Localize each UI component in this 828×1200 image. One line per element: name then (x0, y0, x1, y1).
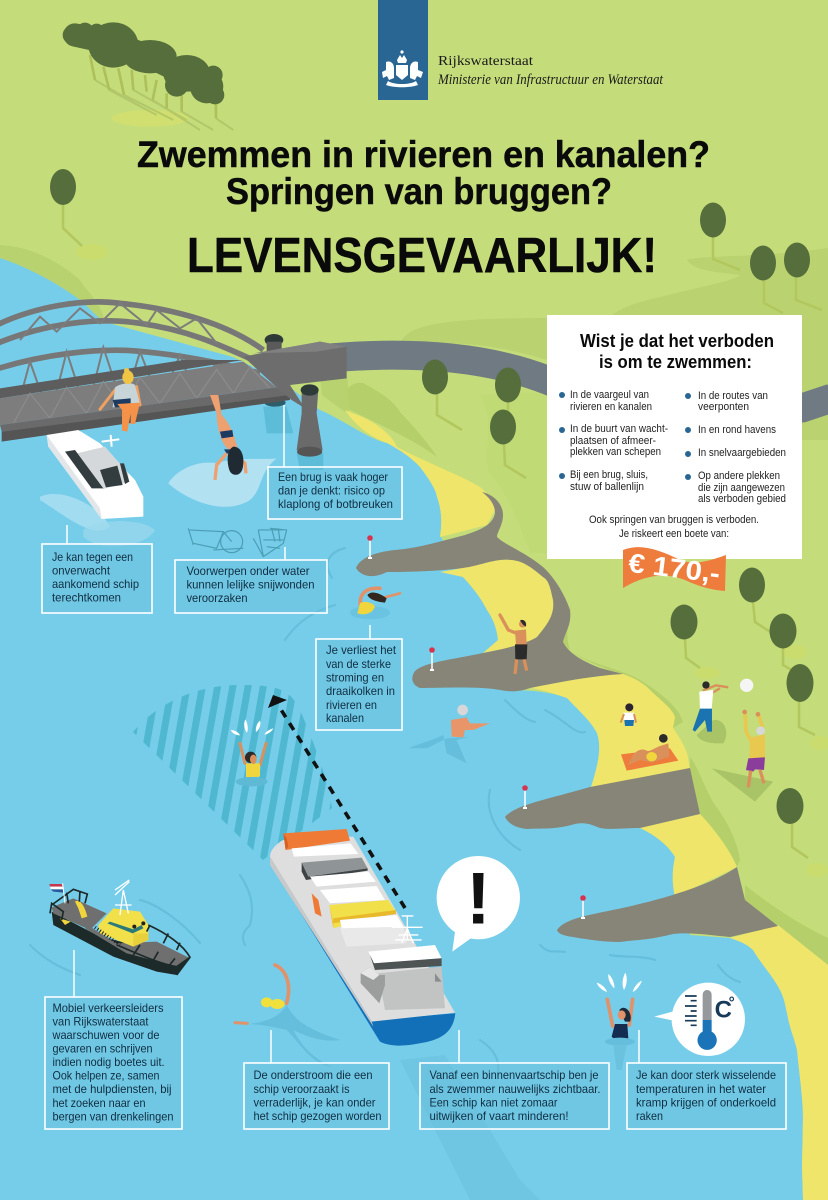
tree cluster top left (63, 22, 233, 130)
callout: currents: draaikolken in (326, 684, 395, 698)
callout: temperature: Je kan door sterk wisselende (636, 1068, 776, 1082)
title: LEVENSGEVAARLIJK! (187, 229, 657, 283)
river water (0, 258, 803, 1200)
callout: traffic controllers: gevaren en schrijven (52, 1042, 152, 1056)
callout: objects under water (175, 547, 327, 613)
logo Rijksoverheid: Ministerie van Infrastructuur en Waterstaat (437, 72, 664, 88)
callout: barely visible: Een schip kan niet zomaar (430, 1096, 558, 1110)
logo text: Rijkswaterstaat (438, 54, 533, 69)
callout: currents: van de sterke (326, 657, 391, 671)
callout: barely visible: uitwijken of vaart minderen! (430, 1109, 568, 1123)
callout: currents: Je verliest het (326, 643, 397, 657)
panel: forbidden places: In en rond havens (698, 424, 776, 436)
panel: forbidden places: Wist je dat het verboden (580, 330, 774, 351)
callout: barely visible (420, 1030, 609, 1129)
panel: forbidden places: Je riskeert een boete van: (619, 528, 729, 540)
callout: traffic controllers: Mobiel verkeersleiders (52, 1001, 164, 1015)
front pillar (297, 390, 323, 450)
panel: forbidden places: stuw of ballenlijn (570, 481, 644, 493)
logo Rijksoverheid (378, 0, 664, 100)
callout: undertow: De onderstroom die een (254, 1068, 372, 1082)
callout: hit by ship: Je kan tegen een (52, 550, 133, 564)
distressed swimmer in dead angle (231, 719, 273, 786)
callout: traffic controllers: met de hulpdiensten, bij (52, 1082, 172, 1096)
panel: forbidden places: plekken van schepen (570, 446, 661, 458)
callout: undertow: verraderlijk, je kan onder (254, 1096, 376, 1110)
title: Zwemmen in rivieren en kanalen? (137, 134, 710, 175)
container ship (270, 829, 455, 1046)
panel: forbidden places: In de vaargeul van (570, 389, 649, 401)
callout: temperature (627, 1030, 786, 1129)
panel: forbidden places (547, 315, 802, 559)
thermometer bubble: ° (729, 994, 735, 1011)
panel: forbidden places: die zijn aangewezen (698, 482, 785, 494)
mast (392, 916, 423, 943)
callout: currents: stroming en (326, 670, 384, 684)
groynes (356, 492, 778, 942)
back pillar (265, 334, 283, 346)
bridge (0, 302, 347, 470)
panel: forbidden places: Bij een brug, sluis, (570, 469, 648, 481)
callout: temperature: temperaturen in het water (636, 1082, 766, 1096)
callout: objects under water: kunnen lelijke snijwonden (186, 578, 314, 592)
callout: bridge height: Een brug is vaak hoger (278, 470, 388, 484)
callout: hit by ship: terechtkomen (52, 590, 121, 604)
speech bubble warning (437, 856, 520, 952)
callout: objects under water: veroorzaken (186, 591, 248, 605)
underwater bike and shopping cart (188, 528, 287, 557)
land shading (0, 245, 828, 965)
callout: undertow: schip veroorzaakt is (254, 1082, 350, 1096)
woman waving in water (597, 973, 642, 1070)
trees (50, 22, 828, 877)
callout: traffic controllers: van Rijkswaterstaat (52, 1014, 149, 1028)
callout: traffic controllers (45, 950, 182, 1129)
callout: traffic controllers: bergen van drenkelingen (52, 1109, 174, 1123)
callout: barely visible: Vanaf een binnenvaartschip ben je (430, 1068, 599, 1082)
old man swimming (408, 705, 490, 763)
shadow of ship in water (400, 1055, 540, 1200)
girl diving from bridge (168, 395, 277, 507)
panel: forbidden places: rivieren en kanalen (570, 401, 652, 413)
callout: hit by ship: aankomend schip (52, 577, 139, 591)
panel: forbidden places: In de buurt van wacht- (570, 423, 668, 435)
panel: forbidden places: Op andere plekken (698, 470, 780, 482)
callout: currents: kanalen (326, 711, 364, 725)
flag markers (367, 535, 586, 918)
east road (330, 355, 828, 414)
panel: forbidden places: plaatsen of afmeer- (570, 435, 656, 447)
callout: currents (316, 625, 402, 730)
hatched area: dead angle of ship (133, 685, 332, 860)
panel: forbidden places: In snelvaargebieden (698, 447, 786, 459)
panel: forbidden places: Ook springen van bruggen is verboden. (589, 514, 759, 526)
callout: bridge height: klaplong of botbreuken (278, 497, 393, 511)
callout: undertow (244, 1030, 389, 1129)
callout: undertow: het schip gezogen worden (254, 1109, 382, 1123)
volleyball players (693, 679, 773, 802)
callout: temperature: kramp krijgen of onderkoeld (636, 1096, 776, 1110)
man on groyne throwing (500, 615, 527, 674)
callout: currents: rivieren en (326, 698, 377, 712)
panel: forbidden places: is om te zwemmen: (599, 351, 752, 372)
crawl swimmer (235, 965, 340, 1067)
swimmer near first groyne (350, 588, 400, 619)
sunbather and child on beach (621, 703, 678, 771)
containers (283, 829, 407, 947)
callout: traffic controllers: het zoeken naar en (52, 1096, 146, 1110)
boy sitting on bridge (100, 368, 140, 432)
callout: traffic controllers: Ook helpen ze, samen (52, 1069, 160, 1083)
panel: forbidden places: als verboden gebied (698, 493, 786, 505)
callout: temperature: raken (636, 1109, 663, 1123)
fine flag: € 170,- (627, 548, 722, 589)
callout: hit by ship: onverwacht (52, 564, 111, 578)
title (137, 134, 710, 283)
water ripples (30, 548, 740, 1075)
callout: traffic controllers: waarschuwen voor de (52, 1028, 160, 1042)
callout: barely visible: als zwemmer nauwelijks zichtbaar. (430, 1082, 600, 1096)
thermometer bubble (654, 983, 745, 1056)
callout: objects under water: Voorwerpen onder water (186, 564, 310, 578)
callout: bridge height: dan je denkt: risico op (278, 484, 385, 498)
speech bubble warning: ! (466, 857, 491, 939)
callout: hit by ship (42, 525, 152, 613)
title: Springen van bruggen? (226, 171, 612, 212)
thermometer bubble: C (715, 996, 732, 1023)
coat of arms (382, 50, 423, 87)
panel: forbidden places: veerponten (698, 401, 749, 413)
rescue vessel (49, 880, 190, 975)
wheelhouse (378, 967, 445, 1010)
callout: bridge height (268, 405, 402, 519)
panel: forbidden places: In de routes van (698, 390, 768, 402)
white motor boat (40, 430, 155, 546)
arrow: blind zone (268, 695, 405, 908)
sand beaches (345, 410, 828, 1200)
callout: traffic controllers: indien nodig boetes uit. (52, 1055, 164, 1069)
